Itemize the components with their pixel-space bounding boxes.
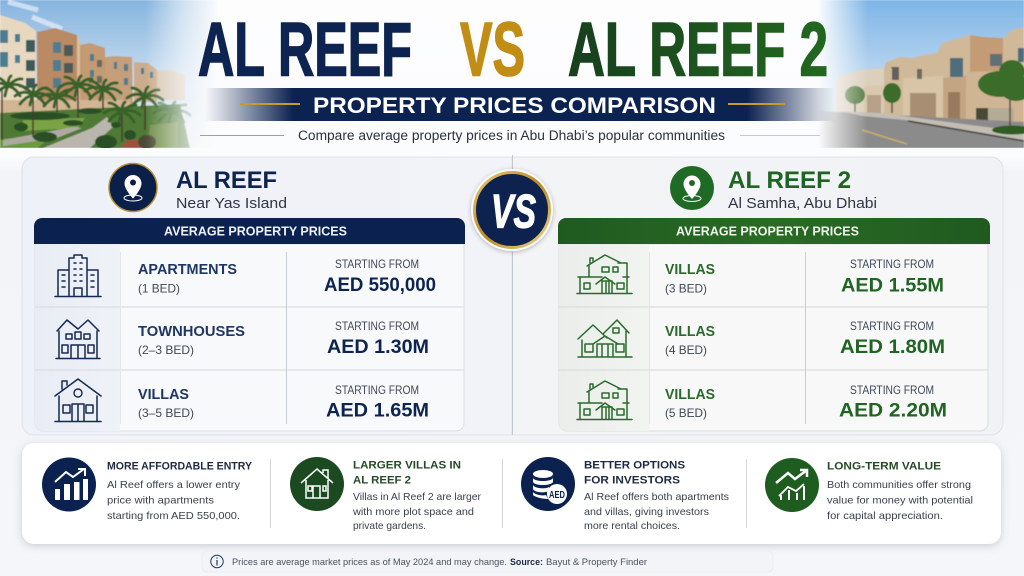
row: villas 5 bed: AED 2.20M xyxy=(839,400,947,422)
row: villas 3 bed: STARTING FROM xyxy=(850,259,934,271)
price table: Al Reef 2: AVERAGE PROPERTY PRICES xyxy=(676,224,859,238)
row: villas 4 bed: AED 1.80M xyxy=(840,337,945,358)
takeaway: larger villas: LARGER VILLAS IN xyxy=(353,460,461,472)
icon: house xyxy=(290,457,344,511)
row: townhouses xyxy=(56,320,429,358)
icon: townhouses xyxy=(56,320,100,358)
row: villas 5 bed xyxy=(577,381,947,422)
row: townhouses: AED 1.30M xyxy=(327,337,429,358)
title: AL REEF 2 xyxy=(568,8,828,92)
icon: rising bar chart xyxy=(42,458,96,512)
fade overlay xyxy=(145,0,218,148)
footnote xyxy=(202,551,773,572)
icon: coins AED: AED xyxy=(549,490,565,501)
takeaway: larger villas xyxy=(290,457,482,532)
icon: growth chart xyxy=(765,458,819,512)
takeaway: better options: BETTER OPTIONS xyxy=(584,460,685,472)
icon: location pin navy xyxy=(109,164,157,212)
takeaway: more affordable entry xyxy=(42,458,253,522)
footnote: Source: xyxy=(510,557,543,568)
subtitle banner: PROPERTY PRICES COMPARISON xyxy=(313,93,716,118)
row: villas 3 bed: VILLAS xyxy=(665,262,715,278)
panel: Al Reef xyxy=(22,157,512,435)
row: villas: STARTING FROM xyxy=(335,385,419,397)
subtitle banner xyxy=(205,88,835,121)
takeaway: better options xyxy=(521,457,729,532)
row: apartments: STARTING FROM xyxy=(335,259,419,271)
tagline: Compare average property prices in Abu Dhabi’s popular communities xyxy=(298,128,725,143)
title: VS xyxy=(460,8,525,92)
icon: villa 3 bed xyxy=(577,255,632,294)
row: villas 4 bed: STARTING FROM xyxy=(850,321,934,333)
row: apartments: (1 BED) xyxy=(138,282,180,296)
price table: Al Reef: AVERAGE PROPERTY PRICES xyxy=(164,224,347,238)
row: apartments xyxy=(55,255,436,296)
photo: Al Reef apartment buildings xyxy=(0,0,218,149)
title: AL REEF xyxy=(198,8,412,92)
title xyxy=(198,8,828,92)
row: villas 4 bed xyxy=(578,320,945,358)
footnote: Prices are average market prices as of May 2024 and may change. xyxy=(232,557,507,568)
takeaway: larger villas: Villas in Al Reef 2 are larger xyxy=(353,492,482,503)
takeaway: better options: and villas, giving investors xyxy=(584,507,709,518)
row: townhouses: TOWNHOUSES xyxy=(138,324,245,340)
takeaway: long-term value: for capital appreciation. xyxy=(827,511,943,522)
row: villas 3 bed: AED 1.55M xyxy=(841,276,944,296)
icon: coins AED xyxy=(521,457,575,511)
badge: VS xyxy=(471,169,553,251)
row: villas: (3–5 BED) xyxy=(138,406,194,420)
takeaway: more affordable entry: starting from AED 550,000. xyxy=(107,511,240,522)
row: villas 3 bed: (3 BED) xyxy=(665,282,707,296)
takeaway: better options: Al Reef offers both apartments xyxy=(584,492,729,503)
icon: villa 4 bed xyxy=(578,320,632,357)
takeaway: larger villas: with more plot space and xyxy=(352,507,474,518)
price table: Al Reef xyxy=(34,218,465,431)
row: villas 5 bed: STARTING FROM xyxy=(850,385,934,397)
price table: Al Reef 2 xyxy=(558,218,990,431)
icon: info xyxy=(211,555,223,568)
panel: key takeaways xyxy=(22,443,1001,544)
row: townhouses: (2–3 BED) xyxy=(138,343,194,357)
badge: VS: VS xyxy=(491,184,536,238)
icon: apartment block xyxy=(55,255,101,296)
location: Near Yas Island: Near Yas Island xyxy=(176,195,287,212)
panel: Al Reef 2 xyxy=(512,157,1003,435)
row: villas: AED 1.65M xyxy=(326,400,429,422)
location: Al Samha: Al Samha, Abu Dhabi xyxy=(728,195,877,212)
row: apartments: AED 550,000 xyxy=(324,275,436,296)
footnote: Bayut & Property Finder xyxy=(546,557,647,568)
row: villas 4 bed: VILLAS xyxy=(665,324,715,340)
takeaway: more affordable entry: MORE AFFORDABLE ENTRY xyxy=(107,460,253,472)
takeaway: larger villas: private gardens. xyxy=(353,521,426,532)
takeaway: more affordable entry: Al Reef offers a lower entry xyxy=(107,480,241,491)
row: villas 3 bed xyxy=(577,255,944,296)
row: villas 5 bed: VILLAS xyxy=(665,387,715,403)
row: apartments: APARTMENTS xyxy=(138,262,237,278)
row: villas 4 bed: (4 BED) xyxy=(665,343,707,357)
row: townhouses: STARTING FROM xyxy=(335,321,419,333)
icon: villa xyxy=(55,379,101,422)
takeaway: better options: more rental choices. xyxy=(584,521,680,532)
takeaway: more affordable entry: price with apartments xyxy=(107,496,214,506)
heading: Al Reef 2: AL REEF 2 xyxy=(728,167,851,194)
photo: Al Reef 2 townhouses xyxy=(818,0,1024,148)
fade overlay xyxy=(818,0,868,148)
takeaway: better options: FOR INVESTORS xyxy=(584,474,680,486)
takeaway: long-term value: LONG-TERM VALUE xyxy=(827,460,941,472)
row: villas 5 bed: (5 BED) xyxy=(665,406,707,420)
takeaway: larger villas: AL REEF 2 xyxy=(353,474,411,486)
takeaway: long-term value: Both communities offer strong xyxy=(827,480,971,491)
icon: location pin green xyxy=(670,166,714,210)
takeaway: long-term value xyxy=(765,458,973,522)
heading: Al Reef: AL REEF xyxy=(176,167,277,194)
row: villas xyxy=(55,379,429,422)
takeaway: long-term value: value for money with potential xyxy=(827,496,973,506)
row: villas: VILLAS xyxy=(138,387,189,403)
icon: villa 5 bed xyxy=(577,381,632,420)
